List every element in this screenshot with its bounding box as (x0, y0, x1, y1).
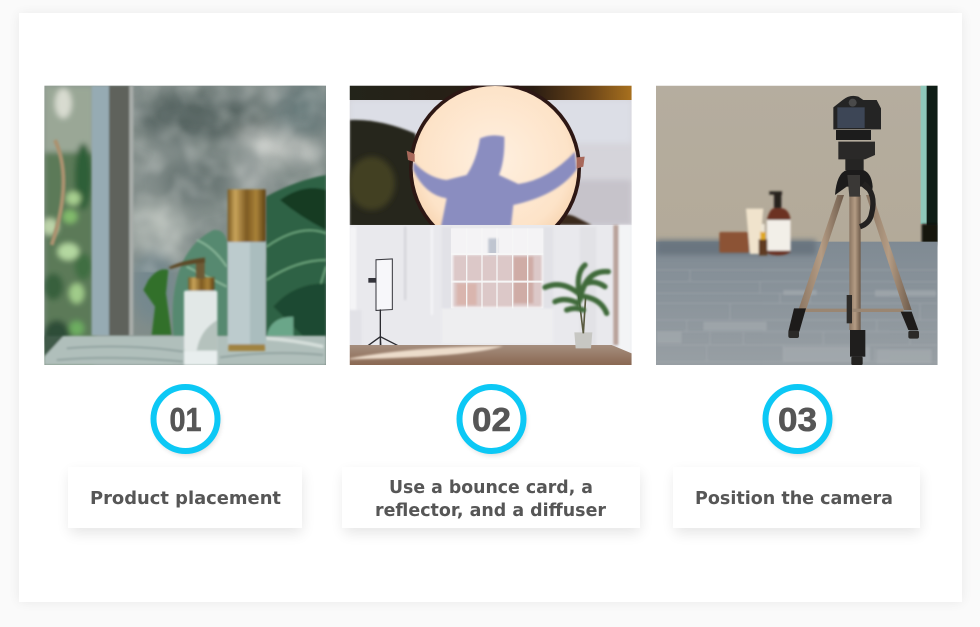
step 1 (68, 387, 302, 533)
photo: camera on tripod (656, 86, 938, 365)
label: bounce card, reflector, diffuser: reflector, and a diffuser (375, 501, 606, 521)
tripod (788, 96, 919, 365)
paving (656, 242, 938, 365)
products (719, 191, 791, 255)
floor (350, 345, 632, 365)
badge 03: 03 (778, 401, 817, 438)
softbox on stand (368, 258, 398, 345)
studio scene (350, 225, 632, 365)
photo: product placement (42, 80, 333, 365)
photo: reflector and studio (348, 82, 632, 365)
badge 03 (766, 387, 832, 455)
label: product placement (68, 467, 302, 533)
leaves (143, 175, 326, 337)
foliage outside window (42, 86, 94, 365)
label: position the camera (673, 467, 920, 533)
marble table (44, 336, 326, 365)
spider and handle (835, 170, 873, 195)
label: position the camera: Position the camera (695, 489, 893, 509)
label: product placement: Product placement (90, 489, 281, 509)
step 3 (673, 387, 920, 533)
step 2 (342, 387, 640, 533)
badge 02 (460, 387, 526, 455)
potted plant (545, 265, 608, 348)
window (451, 228, 543, 308)
label: bounce card, reflector, diffuser: Use a bounce card, a (389, 478, 593, 498)
pump bottle (168, 258, 217, 365)
badge 01: 01 (170, 401, 202, 438)
leg clamps and feet (788, 308, 806, 332)
tall bottle (228, 189, 266, 351)
label: bounce card, reflector, diffuser (342, 467, 640, 533)
badge 02: 02 (472, 401, 511, 438)
badge 01 (154, 387, 220, 455)
camera (838, 142, 875, 159)
reflector scene (350, 86, 632, 225)
